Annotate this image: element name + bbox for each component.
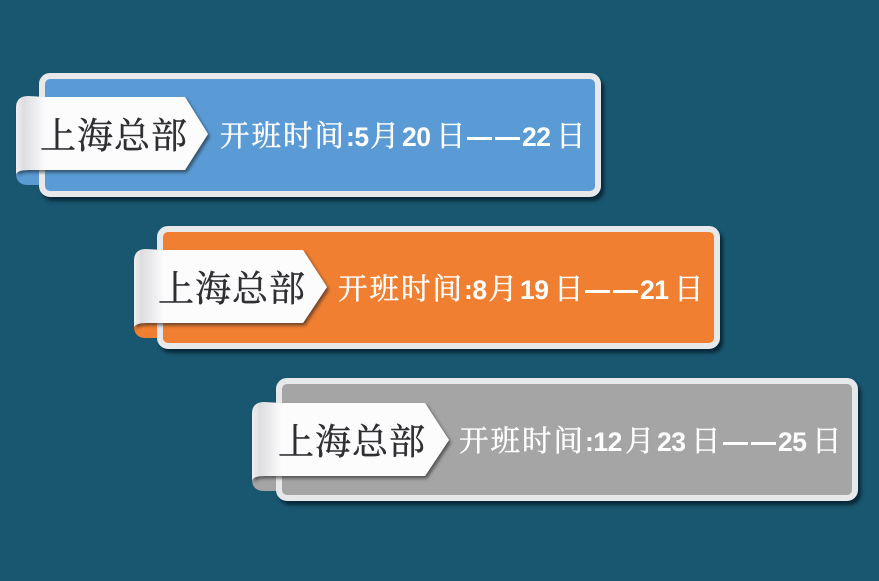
- card: gray panel: [276, 378, 858, 501]
- date text: 日: [691, 426, 721, 458]
- date text: 月: [370, 121, 400, 153]
- date text: 日: [436, 121, 466, 153]
- date text: 日: [554, 274, 584, 306]
- date text: 19: [520, 275, 548, 305]
- ribbon underside: orange: [134, 323, 157, 338]
- date text: 日: [556, 121, 586, 153]
- card: blue panel: [39, 73, 601, 197]
- tag: white arrow label with curl: [16, 96, 212, 178]
- date text: :12: [585, 427, 622, 457]
- card: orange panel: [157, 226, 720, 349]
- date text: 20: [402, 122, 430, 152]
- date text: 月: [488, 274, 518, 306]
- tag: white arrow label with curl: [252, 402, 452, 483]
- date text: 日: [674, 274, 704, 306]
- date text: 21: [640, 275, 668, 305]
- banner: second session: [134, 226, 724, 354]
- date text: [220, 120, 586, 153]
- date text: [338, 274, 704, 306]
- date text: 日: [812, 426, 842, 458]
- date text: 开班时间: [338, 274, 464, 306]
- date text: 开班时间: [220, 121, 346, 153]
- ribbon underside: blue: [16, 170, 39, 185]
- date text: :8: [464, 275, 487, 305]
- date text: 22: [522, 122, 550, 152]
- date text: 25: [778, 427, 806, 457]
- date text: :5: [346, 122, 369, 152]
- date text: [459, 426, 842, 458]
- date text: 开班时间: [459, 426, 585, 458]
- banner: first session: [16, 73, 606, 202]
- date text: 月: [625, 426, 655, 458]
- banner: third session: [252, 378, 862, 506]
- tag text: 上海总部: 上海总部: [278, 422, 426, 462]
- ribbon underside: gray: [252, 476, 276, 491]
- tag: white arrow label with curl: [134, 249, 331, 330]
- tag text: 上海总部: 上海总部: [158, 269, 306, 309]
- tag text: 上海总部: 上海总部: [40, 116, 188, 156]
- date text: 23: [657, 427, 685, 457]
